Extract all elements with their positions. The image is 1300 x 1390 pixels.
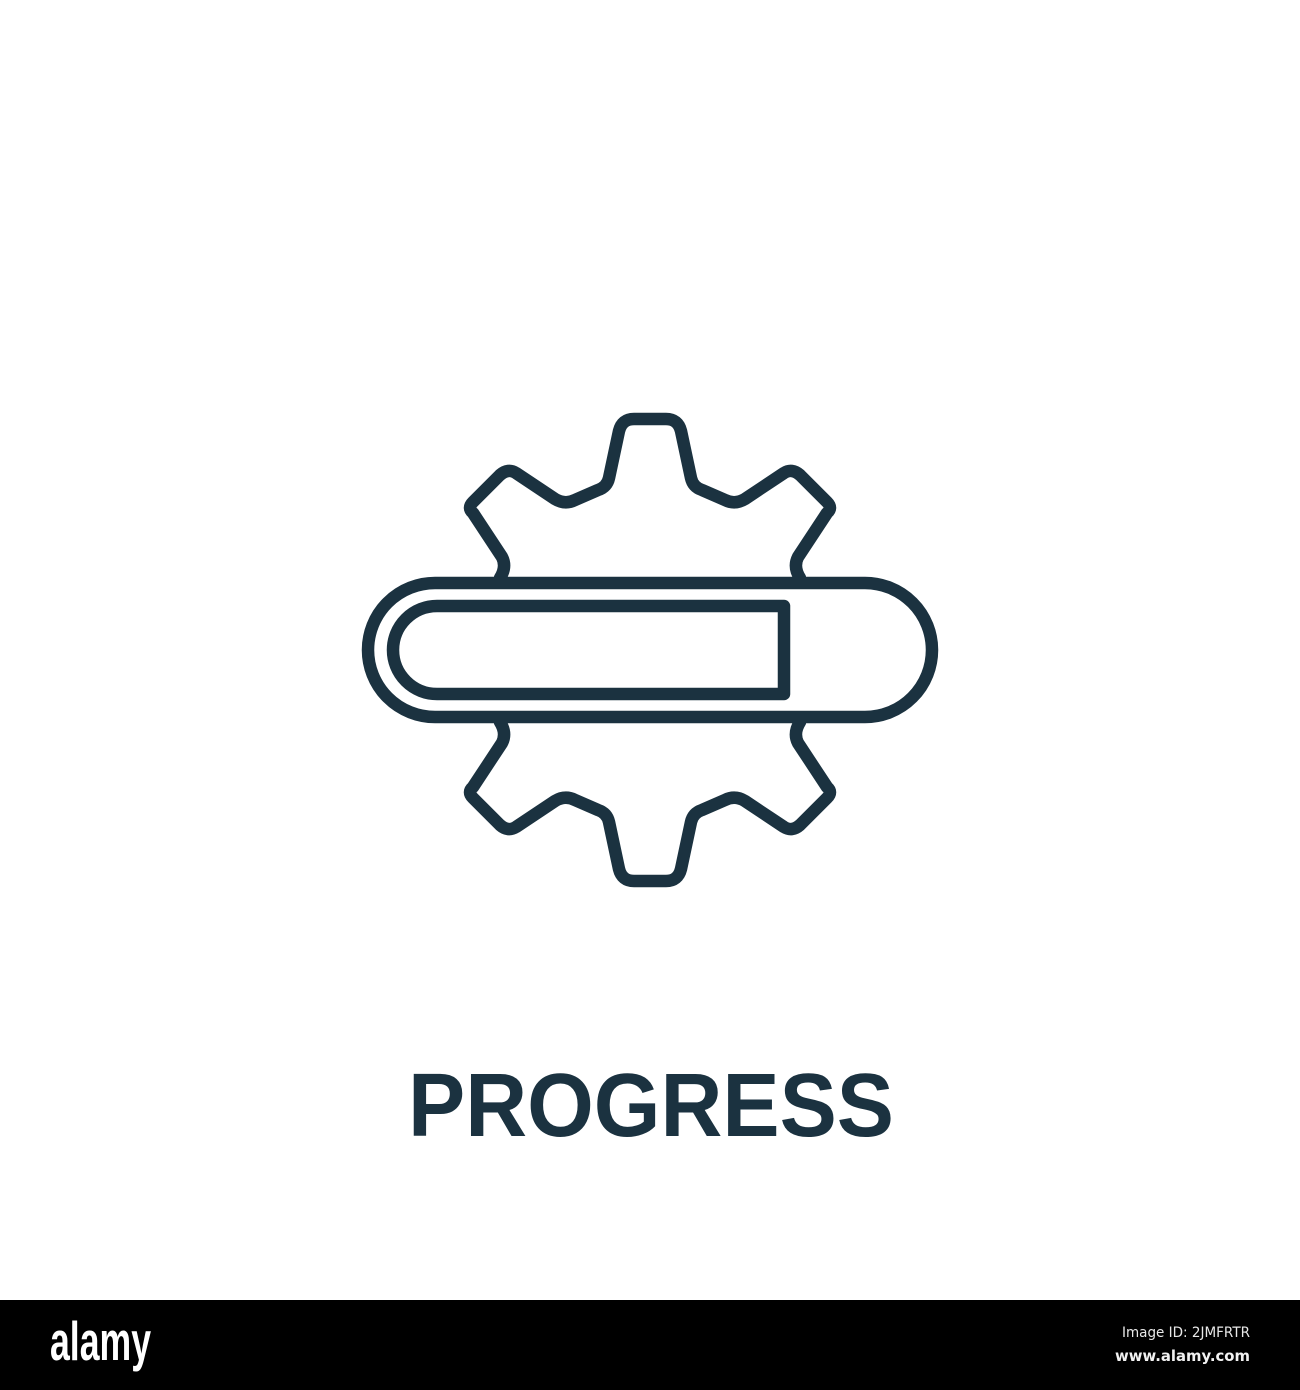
progress bar inner fill: [393, 606, 784, 694]
progress bar outer capsule: [368, 583, 932, 717]
image id: Image ID: 2JMFRTR: [1122, 1325, 1250, 1341]
website: www.alamy.com: [1115, 1347, 1250, 1365]
logo wordmark: alamy: [50, 1310, 151, 1372]
title: PROGRESS: [408, 1056, 894, 1156]
icon: lower half of gear: [470, 722, 830, 881]
footer band: [0, 1300, 1300, 1390]
icon: gear with progress bar: [368, 419, 932, 881]
icon: upper half of gear: [470, 419, 830, 578]
